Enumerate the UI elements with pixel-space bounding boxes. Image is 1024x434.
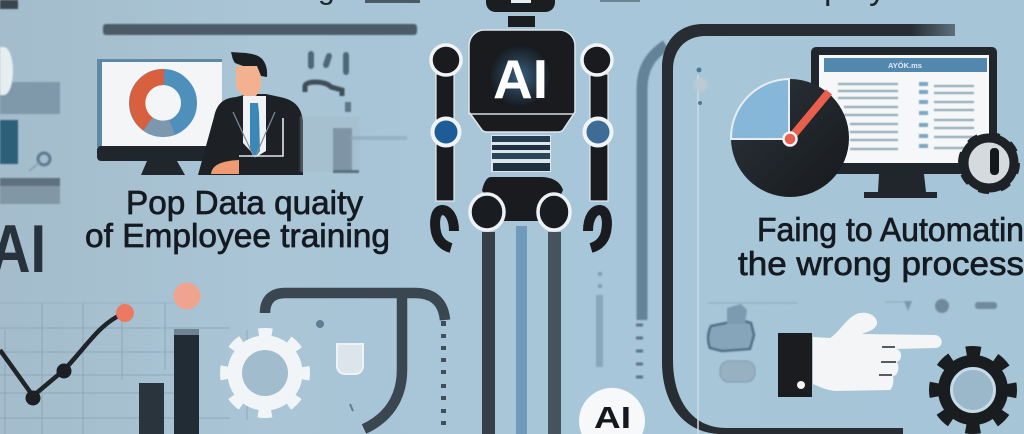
- caption: failing to automate the wrong process: Faing to Automatin: [757, 211, 1024, 248]
- small faded icons: [316, 320, 363, 411]
- report rows: [838, 84, 974, 149]
- bottom-left frame: [265, 293, 445, 429]
- bar chart: [139, 329, 199, 434]
- AI badge: AI: [594, 400, 631, 434]
- red marker dot: [174, 282, 200, 310]
- faded office objects: [300, 54, 407, 173]
- robot right arm: [582, 45, 612, 248]
- dark gear: [935, 352, 1011, 428]
- dotted connector centre: [441, 321, 446, 425]
- robot AI label: AI: [493, 48, 548, 110]
- caption: poor data quality and employee training: [85, 184, 390, 254]
- donut chart: [137, 77, 189, 129]
- cuff: [778, 333, 812, 397]
- pointing hand: [778, 313, 942, 397]
- top heading fragments: [318, 0, 886, 7]
- right panel frame: [662, 24, 955, 434]
- left edge faded panel: [0, 0, 60, 204]
- businessman figure: [198, 52, 303, 175]
- AI badge: [579, 388, 645, 434]
- robot neck: [508, 16, 535, 27]
- gear on monitor corner: [962, 136, 1016, 190]
- faded frame right of robot: [636, 45, 666, 377]
- robot head: [486, 0, 555, 12]
- faded vertical guide: [694, 68, 708, 434]
- gauge pie chart: [731, 79, 849, 197]
- robot hips: [470, 194, 570, 230]
- top bar left panel: [103, 24, 417, 35]
- robot chest stripes: [491, 135, 551, 172]
- robot head slot: [511, 0, 531, 3]
- hand: [813, 313, 942, 391]
- faded hand sketch: [708, 299, 997, 382]
- chart grid: [0, 303, 247, 434]
- line chart: [0, 304, 134, 406]
- robot pelvis: [482, 177, 563, 221]
- caption: failing to automate the wrong process: [738, 211, 1024, 282]
- report monitor: [811, 47, 997, 198]
- robot torso: [469, 30, 575, 132]
- robot legs: [482, 226, 561, 434]
- monitor with donut chart: [97, 59, 222, 175]
- report title: AYÖK.ms: [888, 61, 922, 70]
- robot left arm: [431, 45, 461, 248]
- caption: poor data quality and employee training: of Employee training: [85, 217, 390, 254]
- caption: failing to automate the wrong process: the wrong process: [738, 245, 1024, 282]
- monitor stand: [878, 174, 926, 192]
- caption: poor data quality and employee training: Pop Data quaity: [126, 184, 363, 221]
- faded dotted line: [596, 272, 603, 367]
- AI robot: [431, 0, 612, 434]
- white gear: [226, 334, 304, 412]
